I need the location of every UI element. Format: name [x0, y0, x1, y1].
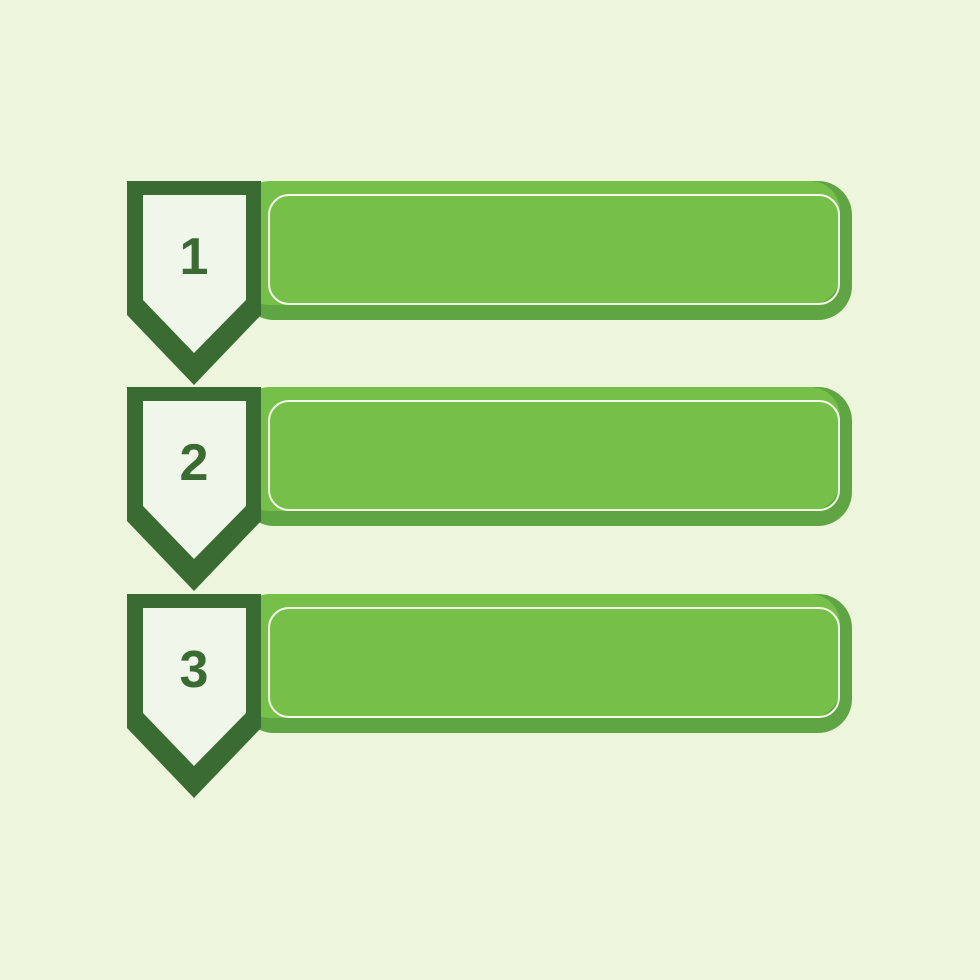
step 2: [127, 387, 852, 591]
bar 1: [240, 181, 852, 320]
step 1: [127, 181, 852, 385]
marker 3: [127, 594, 261, 798]
bar 2: [240, 387, 852, 526]
marker 3: 3: [180, 641, 208, 699]
step 3: [127, 594, 852, 798]
marker 2: 2: [180, 434, 208, 492]
marker 2: [127, 387, 261, 591]
marker 1: [127, 181, 261, 385]
bar 3: [240, 594, 852, 733]
marker 1: 1: [180, 228, 208, 286]
